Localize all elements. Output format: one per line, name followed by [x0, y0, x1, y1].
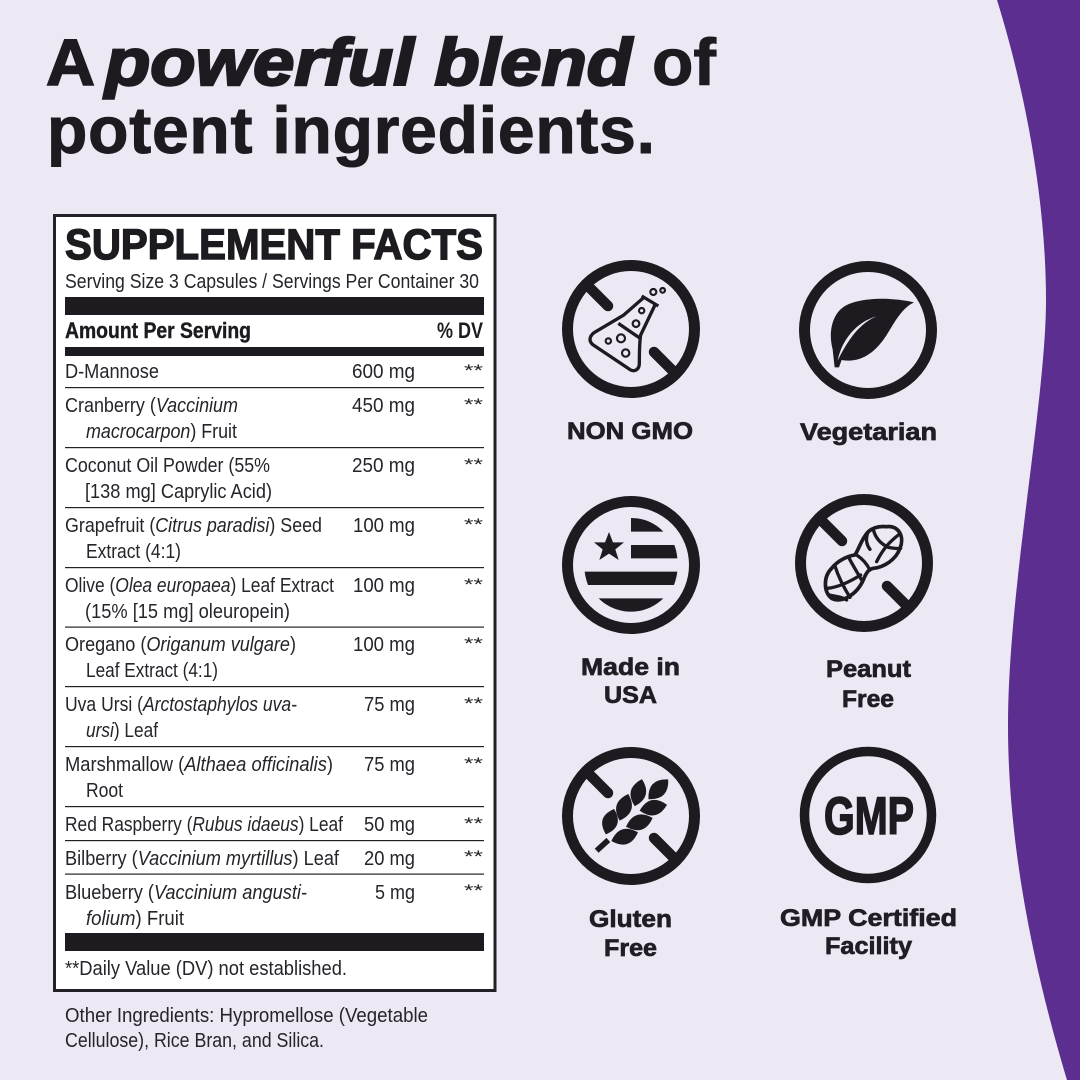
row: Olive [65, 575, 484, 623]
row: Grapefruit [65, 515, 484, 563]
badge: non GMO [567, 266, 694, 445]
table heading: SUPPLEMENT FACTS [65, 221, 483, 269]
row: Bilberry: Bilberry (Vaccinium myrtillus) Leaf [65, 848, 339, 870]
other ingredients text: Cellulose), Rice Bran, and Silica. [65, 1030, 324, 1052]
row: Grapefruit: Extract (4:1) [86, 541, 181, 563]
other ingredients text [65, 1005, 428, 1052]
label [826, 656, 911, 713]
row: Blueberry [65, 881, 484, 930]
row: Bilberry [65, 847, 484, 870]
badge: gluten free [568, 752, 694, 962]
row: Oregano: Leaf Extract (4:1) [86, 660, 218, 682]
row: Coconut Oil Powder: [138 mg] Caprylic Acid) [85, 481, 272, 503]
label: GMP Certified [780, 905, 957, 932]
row: D-Mannose [65, 361, 484, 383]
title: powerful blend [103, 25, 634, 99]
row: Cranberry: macrocarpon) Fruit [86, 421, 237, 443]
icon: crossed-out peanut [800, 500, 928, 626]
row: Marshmallow: Root [86, 780, 123, 802]
row: Coconut Oil Powder [65, 455, 484, 503]
row: Grapefruit: Grapefruit (Citrus paradisi) Seed [65, 515, 322, 537]
row: Cranberry: Cranberry (Vaccinium [65, 395, 238, 417]
icon: GMP circle: GMP [824, 787, 914, 846]
label [589, 906, 672, 962]
row: Marshmallow: ** [464, 754, 484, 773]
row: Olive: Olive (Olea europaea) Leaf Extract [65, 575, 334, 597]
row: Uva Ursi: Uva Ursi (Arctostaphylos uva- [65, 694, 297, 716]
label: Gluten [589, 906, 672, 933]
row: Oregano [65, 634, 484, 682]
label: Free [604, 935, 657, 962]
badge: made in USA [568, 502, 694, 709]
row: Marshmallow [65, 754, 484, 802]
title [46, 25, 717, 167]
icon: leaf [804, 266, 932, 394]
title: of [652, 25, 717, 99]
row: Marshmallow: 75 mg [364, 754, 415, 776]
label: Facility [825, 933, 913, 960]
row: D-Mannose: D-Mannose [65, 361, 159, 383]
label [780, 905, 957, 960]
row: Bilberry: ** [464, 847, 484, 866]
label [581, 654, 680, 709]
row: Red Raspberry: 50 mg [364, 814, 415, 836]
row: Grapefruit: ** [464, 515, 484, 534]
row: Marshmallow: Marshmallow (Althaea officinalis) [65, 754, 333, 776]
row: Uva Ursi: ** [464, 694, 484, 713]
row: Oregano: ** [464, 634, 484, 653]
row: Oregano: Oregano (Origanum vulgare) [65, 634, 296, 656]
row: Red Raspberry [65, 814, 484, 836]
icon: crossed-out flask [568, 266, 694, 392]
label: NON GMO [567, 418, 693, 445]
row: Uva Ursi [65, 694, 484, 742]
label: Made in [581, 654, 680, 681]
row: Cranberry: ** [464, 395, 484, 414]
row: Uva Ursi: ursi) Leaf [86, 720, 158, 742]
label: Free [842, 686, 894, 713]
column header: % DV [437, 318, 483, 343]
label: Vegetarian [800, 419, 937, 446]
footnote: **Daily Value (DV) not established. [65, 958, 347, 980]
label: USA [604, 682, 657, 709]
badge: peanut free [800, 500, 928, 713]
row: D-Mannose: 600 mg [352, 361, 415, 383]
row: Olive: ** [464, 575, 484, 594]
row: Red Raspberry: ** [464, 814, 484, 833]
row: Blueberry: folium) Fruit [86, 908, 184, 930]
other ingredients text: Other Ingredients: Hypromellose (Vegetable [65, 1005, 428, 1027]
row: Cranberry [65, 395, 484, 443]
badge: GMP certified [780, 752, 957, 960]
row: Coconut Oil Powder: Coconut Oil Powder (55% [65, 455, 270, 477]
column header [65, 318, 483, 343]
row: Olive: (15% [15 mg] oleuropein) [85, 601, 290, 623]
panel: supplement facts table [54, 216, 495, 990]
serving size line: Serving Size 3 Capsules / Servings Per Container 30 [65, 271, 479, 293]
row: Coconut Oil Powder: 250 mg [352, 455, 415, 477]
row: Oregano: 100 mg [353, 634, 415, 656]
row: Cranberry: 450 mg [352, 395, 415, 417]
row: Bilberry: 20 mg [364, 848, 415, 870]
badge: vegetarian [800, 266, 937, 446]
row: Uva Ursi: 75 mg [364, 694, 415, 716]
column header: Amount Per Serving [65, 318, 251, 343]
row: Blueberry: ** [464, 881, 484, 900]
row: Blueberry: Blueberry (Vaccinium angusti- [65, 882, 307, 904]
purple wave side band [997, 0, 1080, 1080]
row: Olive: 100 mg [353, 575, 415, 597]
label: Peanut [826, 656, 911, 683]
icon: GMP circle [804, 752, 932, 878]
icon: crossed-out wheat [568, 752, 694, 880]
row: Coconut Oil Powder: ** [464, 455, 484, 474]
row: Blueberry: 5 mg [375, 882, 415, 904]
title: A [46, 25, 95, 99]
row: D-Mannose: ** [464, 361, 484, 380]
row: Red Raspberry: Red Raspberry (Rubus idaeus) Leaf [65, 814, 343, 836]
icon: flag in circle [568, 502, 694, 628]
title: potent ingredients. [47, 93, 655, 167]
row: Grapefruit: 100 mg [353, 515, 415, 537]
